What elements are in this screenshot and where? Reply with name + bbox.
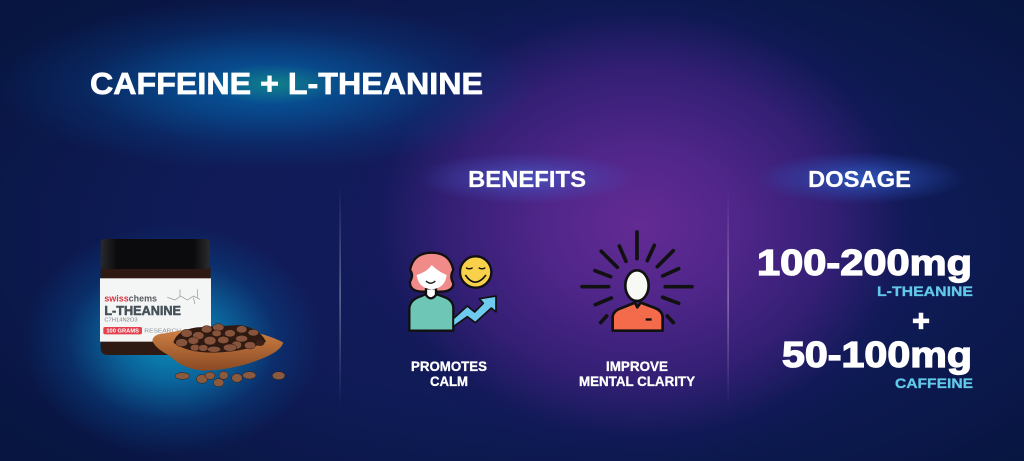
icon: mental clarity person with rays: [582, 232, 692, 331]
label: improve mental clarity: MENTAL CLARITY: [579, 374, 695, 389]
l-theanine label: L-THEANINE: [877, 283, 973, 299]
weight badge: [103, 327, 142, 334]
loose beans: [175, 371, 285, 387]
caffeine dose: 50-100mg: [782, 334, 972, 375]
jar label: [100, 278, 211, 342]
label: promotes calm: PROMOTES: [411, 359, 487, 374]
product image: jar and bowl of coffee beans: [100, 239, 285, 387]
title: CAFFEINE + L-THEANINE: [90, 66, 483, 101]
label: promotes calm: CALM: [430, 374, 468, 389]
label: improve mental clarity: IMPROVE: [606, 359, 668, 374]
research tag: RESEARCH: [144, 329, 181, 335]
plus sign: +: [912, 305, 930, 338]
formula: C7H14N2O3: [104, 318, 138, 324]
heading: dosage: DOSAGE: [808, 166, 911, 192]
jar glass: [101, 267, 211, 355]
product name: L-THEANINE: [104, 303, 181, 318]
jar label: 100 GRAMS: [106, 329, 139, 335]
brand name: swisschems: [104, 293, 157, 303]
jar lid: [101, 239, 210, 269]
icon: calm woman with smiley and rising arrow: [409, 253, 496, 331]
l-theanine dose: 100-200mg: [757, 242, 972, 283]
label: promotes calm: [411, 359, 487, 389]
label: improve mental clarity: [579, 359, 695, 389]
wooden bowl: [152, 328, 283, 371]
dosage amounts: [757, 242, 973, 391]
heading: benefits: BENEFITS: [468, 166, 586, 192]
caffeine label: CAFFEINE: [895, 375, 973, 391]
molecule: [167, 289, 200, 304]
beans in bowl: [176, 324, 264, 352]
